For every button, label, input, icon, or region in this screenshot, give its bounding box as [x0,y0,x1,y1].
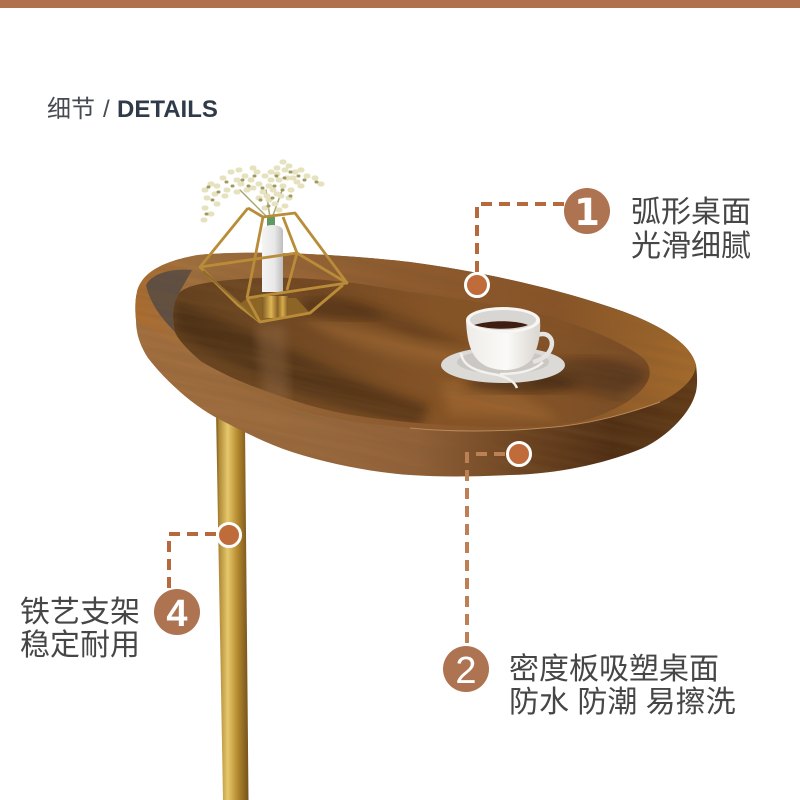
number badge 4 [154,589,200,635]
number badge 4: 4 [166,593,188,635]
green stem [267,217,275,228]
cup inner shade [470,310,536,330]
label 2: 密度板吸塑桌面 [509,653,719,686]
gold wire frame [200,208,347,322]
label 4: 铁艺支架 [20,596,140,629]
saucer [441,347,565,383]
table upper rim [135,253,696,431]
marker dot 2 [508,442,530,466]
title: 细节 [47,96,95,123]
vase shadow [300,298,385,320]
wood grain texture [136,255,671,476]
marker dot 1 [466,274,488,296]
tray dark grain bands [175,300,430,425]
gold metal pole [216,410,248,800]
number badge 1 [564,188,610,234]
title: DETAILS [117,96,218,123]
cup shadow [465,375,575,393]
left inner wall shadow [146,270,192,332]
top colour bar [0,0,800,8]
label 2: 防水 防潮 易擦洗 [509,686,736,719]
dried flowers [203,162,322,220]
coffee [474,321,528,329]
cup handle [533,334,552,362]
title: / [103,96,110,123]
label 1: 光滑细腻 [631,230,751,263]
callout 2 [443,442,736,719]
leader line 4 [169,534,216,590]
coffee cup on saucer [441,307,575,393]
front crease highlight [410,402,660,431]
gold base plate [238,298,310,322]
spoon cord [461,353,543,388]
number badge 2: 2 [455,650,477,692]
callout 1 [466,188,751,296]
tray light band [440,381,560,420]
table side edge [135,253,697,476]
wooden table top [135,252,698,476]
label 4: 稳定耐用 [20,629,140,662]
number badge 1: 1 [574,191,600,234]
marker dot 4 [218,524,240,546]
light reflection [255,325,290,405]
cup rim [466,307,540,333]
number badge 2 [443,646,489,692]
recessed tray surface [173,278,650,424]
cup body [466,320,540,370]
leader line 2 [467,454,505,644]
title [47,96,218,123]
label 1: 弧形桌面 [631,196,751,229]
cup cast shadow on right [530,358,650,398]
white vase tube [262,225,283,292]
vase with flowers [200,162,385,322]
leader line 1 [477,204,566,272]
callout 4 [20,524,240,662]
